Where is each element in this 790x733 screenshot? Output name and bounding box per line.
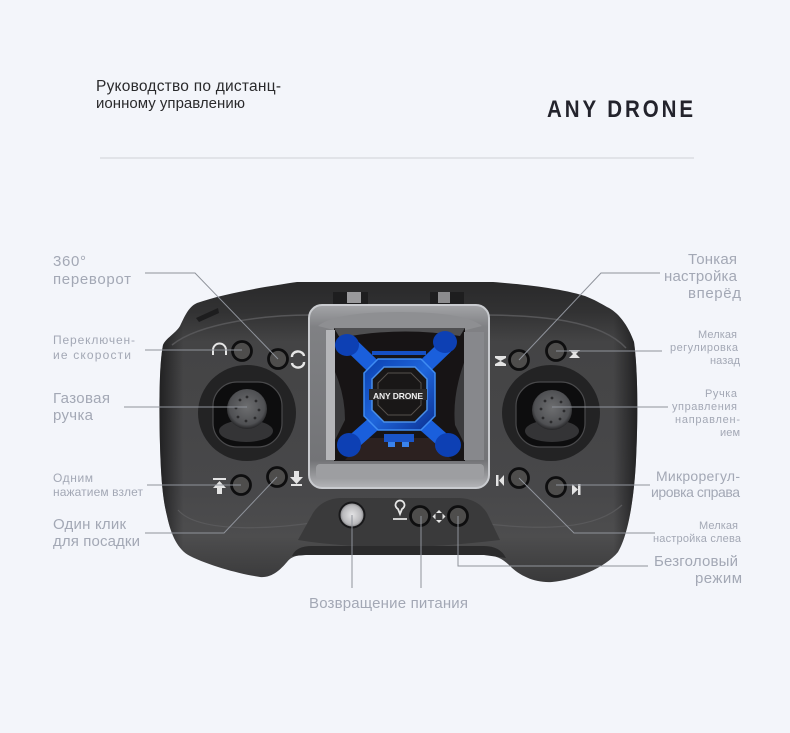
drone motors: [335, 331, 461, 457]
label: throttle stick: Газовая: [53, 390, 110, 407]
label: direction stick: ием: [720, 427, 740, 439]
body side shading: [159, 282, 637, 582]
right joystick: [502, 365, 600, 461]
label: backward fine tuning: регулировка: [670, 342, 739, 354]
icon: speed: [213, 344, 226, 355]
label: one-click landing: для посадки: [53, 533, 140, 550]
label: forward fine tuning: настройка: [664, 268, 738, 285]
label: one-key take-off: нажатием взлет: [53, 485, 144, 499]
buttons: [232, 342, 566, 528]
drone bay: [334, 328, 465, 461]
label: one-key take-off: Одним: [53, 471, 93, 485]
label: forward fine tuning: [664, 251, 741, 302]
icon: flip: [292, 351, 304, 368]
icon: take-off: [213, 478, 226, 494]
label: headless mode: Безголовый: [654, 553, 738, 570]
flip button: [268, 350, 288, 368]
forward trim button: [510, 350, 528, 370]
icon: right trim: [572, 484, 580, 495]
bottom edge band: [292, 546, 506, 558]
drone label: ANY DRONE: [373, 391, 423, 401]
title: Руководство по дистанц-: [96, 78, 281, 95]
label: direction stick: управления: [672, 401, 737, 413]
return button: [410, 506, 430, 526]
label: right micro trim: [651, 468, 740, 500]
headless button: [448, 506, 468, 526]
label: backward fine tuning: назад: [710, 355, 741, 367]
label: forward fine tuning: вперёд: [688, 285, 741, 302]
label: 360 flip: переворот: [53, 271, 131, 288]
lower ridge: [178, 505, 622, 528]
backward trim button: [546, 342, 566, 360]
drone case: [309, 305, 489, 488]
landing button: [268, 468, 286, 486]
label: backward fine tuning: [670, 329, 741, 367]
label: one-click landing: [53, 516, 140, 550]
power button: [340, 502, 364, 528]
drone arms: [352, 346, 446, 443]
left joystick: [198, 365, 296, 461]
brand logo: ANY DRONE: [547, 95, 693, 122]
controller body: [159, 282, 637, 582]
title: ионному управлению: [96, 95, 245, 112]
label: left fine tuning: настройка слева: [653, 533, 742, 545]
button icons: [213, 344, 580, 523]
label: 360 flip: [53, 253, 131, 288]
label: direction stick: [672, 388, 740, 439]
label: backward fine tuning: Мелкая: [698, 329, 737, 341]
label: headless mode: [654, 553, 742, 587]
label: one-click landing: Один клик: [53, 516, 126, 533]
icon: return home: [393, 500, 407, 519]
label: right micro trim: Микрорегул-: [656, 468, 740, 484]
top ridge: [172, 315, 626, 348]
remote controller: [159, 282, 637, 582]
label: headless mode: режим: [695, 570, 742, 587]
icon: headless: [432, 510, 446, 523]
label: speed switch: Переключен-: [53, 333, 135, 347]
label: speed switch: ие скорости: [53, 348, 131, 362]
left trim button: [510, 468, 528, 488]
right trim button: [546, 478, 566, 496]
label: power return: Возвращение питания: [309, 595, 468, 612]
label: forward fine tuning: Тонкая: [688, 251, 737, 268]
drone body: [364, 359, 435, 430]
lower button bar: [298, 498, 500, 547]
label: speed switch: [53, 333, 135, 362]
hinge clips: [333, 292, 464, 306]
drone tail: [384, 434, 414, 442]
label: direction stick: направлен-: [675, 414, 740, 426]
label: direction stick: Ручка: [705, 388, 738, 400]
label: left fine tuning: Мелкая: [699, 520, 738, 532]
icon: forward trim: [495, 356, 506, 366]
label: throttle stick: [53, 390, 110, 424]
leader lines: [124, 273, 668, 588]
icon: landing: [290, 471, 303, 486]
label: left fine tuning: [653, 520, 742, 545]
label: right micro trim: ировка справа: [651, 484, 740, 500]
title: [96, 78, 281, 112]
label: one-key take-off: [53, 471, 144, 499]
icon: backward trim: [569, 350, 580, 358]
take-off button: [232, 476, 250, 494]
label: throttle stick: ручка: [53, 407, 94, 424]
speed button: [232, 342, 252, 360]
speaker slot: [196, 308, 219, 322]
label: 360 flip: 360°: [53, 253, 86, 270]
icon: left trim: [496, 475, 504, 486]
